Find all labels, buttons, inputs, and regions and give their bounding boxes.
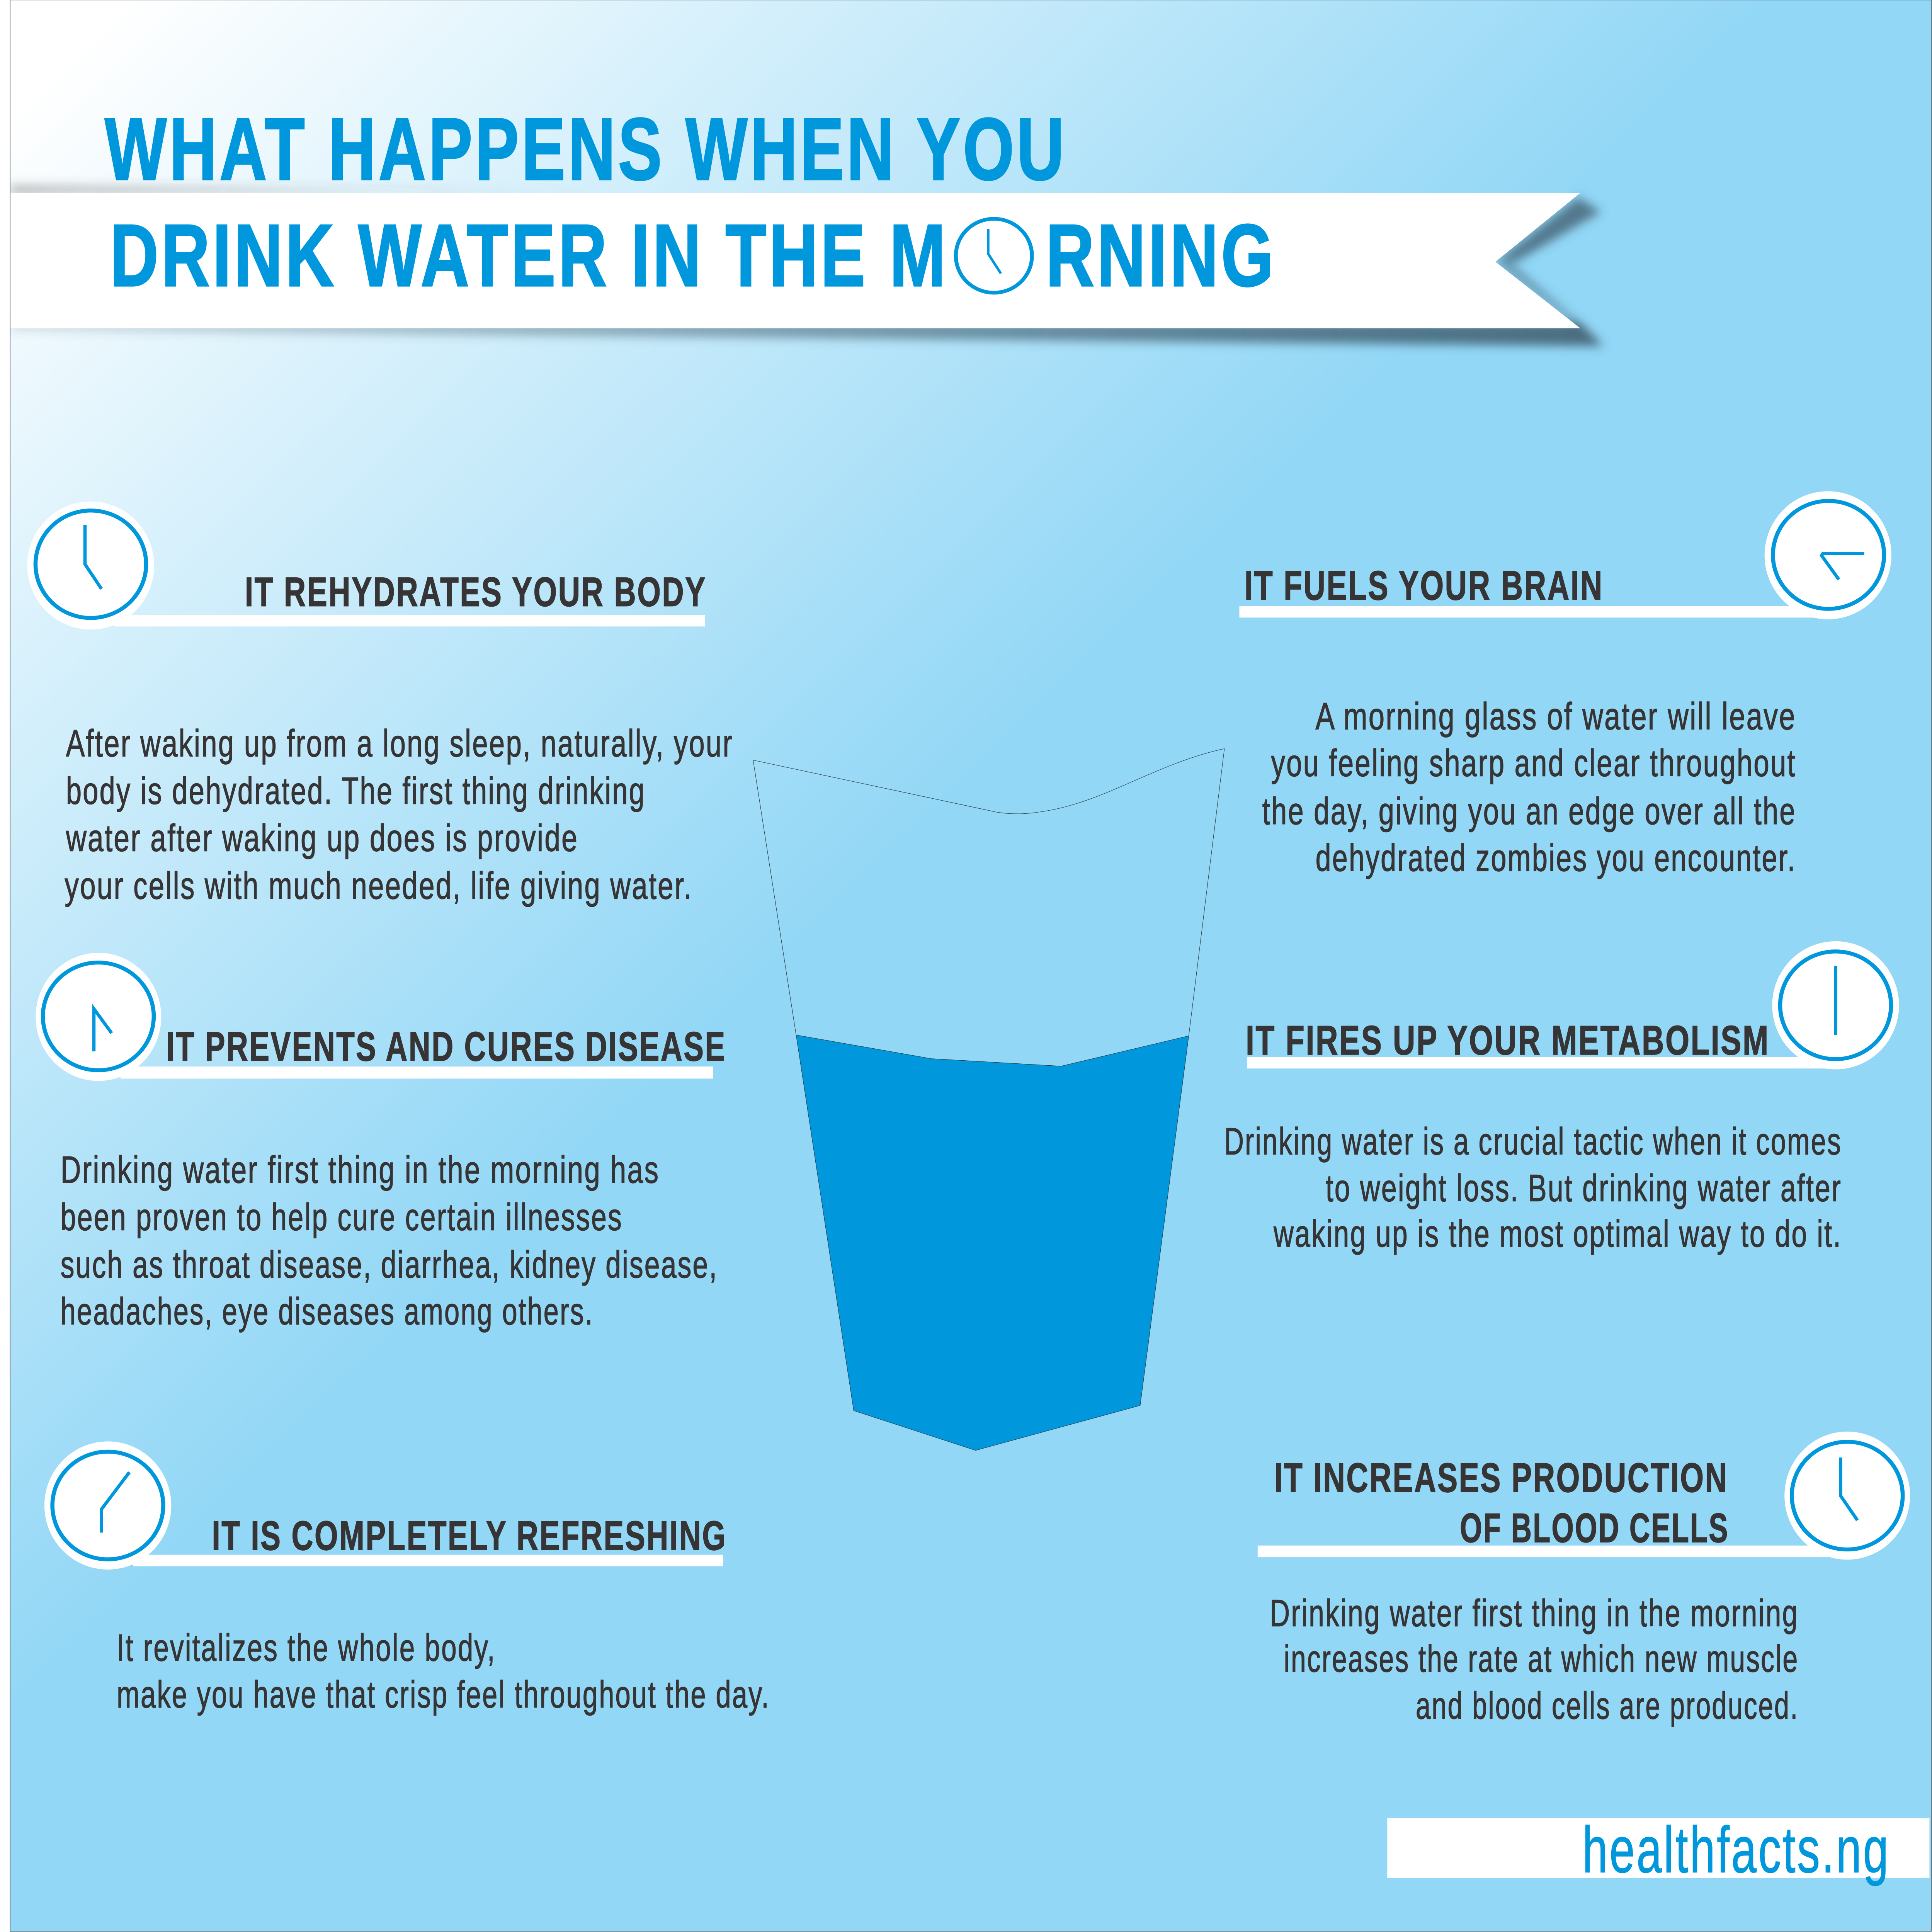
brand footer: [1387, 1814, 1929, 1886]
body text: After waking up from a long sleep, naturally, your: [66, 722, 733, 765]
panel: it increases production of blood cells: [1258, 1432, 1910, 1727]
glass of water: [753, 749, 1225, 1451]
icon: title clock: [956, 219, 1032, 293]
body text: such as throat disease, diarrhea, kidney disease,: [61, 1243, 718, 1286]
ribbon shadow: [10, 185, 1604, 346]
title line two: RNING: [1046, 206, 1276, 305]
icon: clock: [1784, 1432, 1910, 1560]
heading: [1274, 1455, 1729, 1551]
footer plate: [1387, 1818, 1929, 1878]
icon: clock: [1772, 941, 1899, 1070]
heading underline: [133, 1555, 723, 1566]
water: [796, 1035, 1189, 1451]
title line two: DRINK WATER IN THE M: [110, 206, 948, 305]
icon: clock: [36, 953, 161, 1081]
heading underline: [1239, 606, 1818, 617]
body text: been proven to help cure certain illnesses: [61, 1196, 623, 1238]
body text: headaches, eye diseases among others.: [61, 1290, 594, 1333]
ribbon banner: [10, 193, 1580, 328]
panel: it fuels your brain: [1239, 491, 1891, 879]
heading underline: [1247, 1057, 1827, 1068]
heading: IT REHYDRATES YOUR BODY: [245, 569, 707, 615]
body text: Drinking water first thing in the morning has: [61, 1148, 660, 1191]
body text: [117, 1626, 770, 1716]
body text: water after waking up does is provide: [66, 817, 578, 859]
glass outline: [753, 749, 1225, 1036]
heading underline: [121, 1066, 713, 1078]
body text: body is dehydrated. The first thing drinking: [66, 770, 646, 812]
body text: your cells with much needed, life giving water.: [65, 864, 693, 907]
body text: make you have that crisp feel throughout the day.: [117, 1673, 770, 1716]
heading underline: [1258, 1546, 1828, 1557]
heading: OF BLOOD CELLS: [1460, 1505, 1729, 1551]
icon: clock: [44, 1441, 171, 1570]
heading: IT INCREASES PRODUCTION: [1274, 1455, 1728, 1501]
body text: [1270, 1592, 1799, 1727]
panel: it prevents and cures disease: [36, 953, 726, 1333]
body text: [1224, 1120, 1842, 1255]
panel: it rehydrates your body: [27, 502, 733, 907]
heading underline: [114, 615, 705, 626]
heading: IT FUELS YOUR BRAIN: [1245, 562, 1604, 608]
body text: [1262, 695, 1796, 879]
icon: clock: [1765, 491, 1891, 619]
body text: It revitalizes the whole body,: [117, 1626, 496, 1669]
panel: it is completely refreshing: [44, 1441, 770, 1716]
body text: [61, 1148, 718, 1333]
title line one: WHAT HAPPENS WHEN YOU: [105, 100, 1067, 199]
body text: [65, 722, 733, 907]
heading: IT PREVENTS AND CURES DISEASE: [166, 1023, 726, 1070]
panel: it fires up your metabolism: [1224, 941, 1899, 1255]
icon: clock: [27, 502, 154, 629]
heading: IT IS COMPLETELY REFRESHING: [212, 1512, 727, 1559]
